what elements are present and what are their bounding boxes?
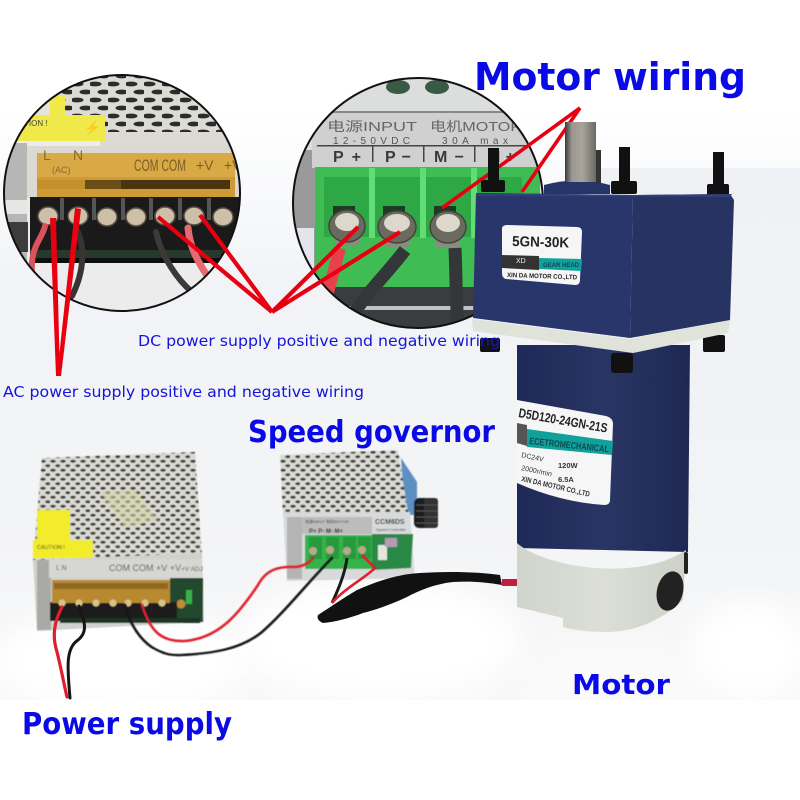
power supply perforated cover: [33, 452, 202, 562]
caption: AC wiring: AC power supply positive and negative wiring: [3, 383, 364, 401]
power supply terminal labels: L N: [56, 565, 67, 572]
governor label strip: P+ P- M- M+: [309, 529, 344, 535]
motor label: 120W: [558, 461, 579, 470]
governor knob: [414, 498, 438, 528]
motor end cap switch: [653, 568, 687, 614]
gearbox plate: [472, 319, 730, 353]
inset left metal: [294, 150, 315, 268]
motor end cap: [517, 543, 688, 632]
governor PCB: [372, 534, 413, 570]
gearbox output shaft: [544, 122, 610, 194]
gearbox label: [502, 225, 582, 285]
inset wires: [324, 246, 464, 310]
inset yellow caution label: TION !: [24, 119, 48, 128]
inset label band: 电机MOTOR: [430, 119, 522, 134]
inset amber cover: L: [43, 147, 51, 163]
heading: Speed governor: Speed governor: [248, 415, 495, 450]
motor label: DC24V: [521, 452, 544, 464]
motor label: XIN DA MOTOR CO.,LTD: [521, 474, 591, 499]
inset label band: 12-50VDC: [333, 136, 410, 147]
inset label band: [312, 111, 542, 168]
inset wires: [32, 226, 210, 296]
governor body: [283, 512, 415, 581]
inset green terminal block: [315, 167, 540, 287]
motor cylinder: [517, 345, 690, 552]
inset label band: M+: [487, 149, 515, 166]
gearbox label: GEAR HEAD: [543, 262, 579, 269]
power supply terminal labels: COM COM +V +V: [109, 563, 181, 573]
gearbox label: XIN DA MOTOR CO.,LTD: [507, 272, 577, 281]
motor label: 6.5A: [558, 475, 574, 484]
gearbox label: 5GN-30K: [512, 234, 570, 252]
inset yellow caution label: [15, 95, 105, 141]
red pointer lines: DC wiring: [158, 215, 400, 312]
governor label strip: Speed Controller: [376, 527, 407, 532]
heading: Motor wiring: Motor wiring: [474, 55, 746, 99]
power supply terminal block: [50, 602, 177, 621]
motor label: D5D120-24GN-21S: [517, 405, 609, 436]
inset left bracket: [5, 143, 27, 261]
inset outline: [293, 78, 543, 328]
gearbox housing: [473, 193, 734, 338]
motor label: ECETROMECHANICAL: [529, 436, 610, 455]
motor mounting screws: [480, 335, 725, 373]
red pointer lines: motor wiring: [442, 108, 580, 208]
inset amber cover: COM COM: [134, 156, 186, 175]
inset perforated cover: [58, 76, 222, 132]
power supply PCB: [170, 578, 203, 622]
governor perforated cover: [280, 450, 408, 514]
gearbox bolts: [481, 147, 729, 196]
inset circle: power supply terminals: [0, 70, 245, 315]
power supply terminal labels: +V ADJ: [181, 566, 203, 573]
inset circle: speed governor terminals: [290, 75, 550, 335]
governor label strip: [302, 517, 407, 535]
inset terminal block: [30, 197, 242, 263]
inset label band: M−: [434, 149, 464, 166]
wires: governor to motor: [318, 555, 517, 623]
photo: power supply unit: [33, 452, 204, 631]
inset amber cover: +V: [196, 157, 214, 173]
power supply yellow caution label: [33, 510, 93, 558]
inset terminal labels: [27, 146, 245, 198]
inset outline: [4, 75, 240, 311]
inset yellow caution label: ⚡: [84, 120, 100, 136]
caption: DC wiring: DC power supply positive and negative wiring: [138, 332, 500, 350]
motor label: 2000r/min: [521, 465, 553, 478]
inset label band: 电源INPUT: [327, 119, 417, 134]
wires: power supply to speed governor: [125, 558, 332, 655]
governor label strip: 电源INPUT 电机MOTOR: [305, 518, 349, 524]
inset amber cover: [37, 147, 242, 197]
heading: Power supply: Power supply: [22, 707, 232, 742]
governor green terminal: [305, 535, 372, 569]
motor label: [517, 400, 613, 505]
governor label strip: CCM6DS: [375, 519, 405, 526]
governor blue side: [401, 458, 417, 515]
photo: speed governor: [280, 450, 438, 581]
power supply terminal labels: [49, 559, 203, 578]
inset amber cover: N: [73, 147, 83, 163]
heading: Motor: Motor: [572, 668, 670, 701]
power supply yellow caution label: CAUTION !: [37, 545, 65, 551]
power supply orange cover: [52, 580, 170, 603]
inset label band: 30A max: [442, 136, 508, 147]
inset dark base: [333, 287, 474, 327]
inset amber cover: (AC): [52, 165, 70, 175]
inset label band: P+: [333, 149, 361, 166]
inset label band: P−: [385, 149, 411, 166]
power supply body: [33, 553, 204, 631]
motor: [472, 122, 734, 632]
wires: AC input: [54, 606, 85, 698]
inset amber cover: +V: [224, 157, 242, 173]
gearbox label: XD: [516, 258, 526, 265]
red pointer lines: AC wiring: [50, 208, 81, 376]
